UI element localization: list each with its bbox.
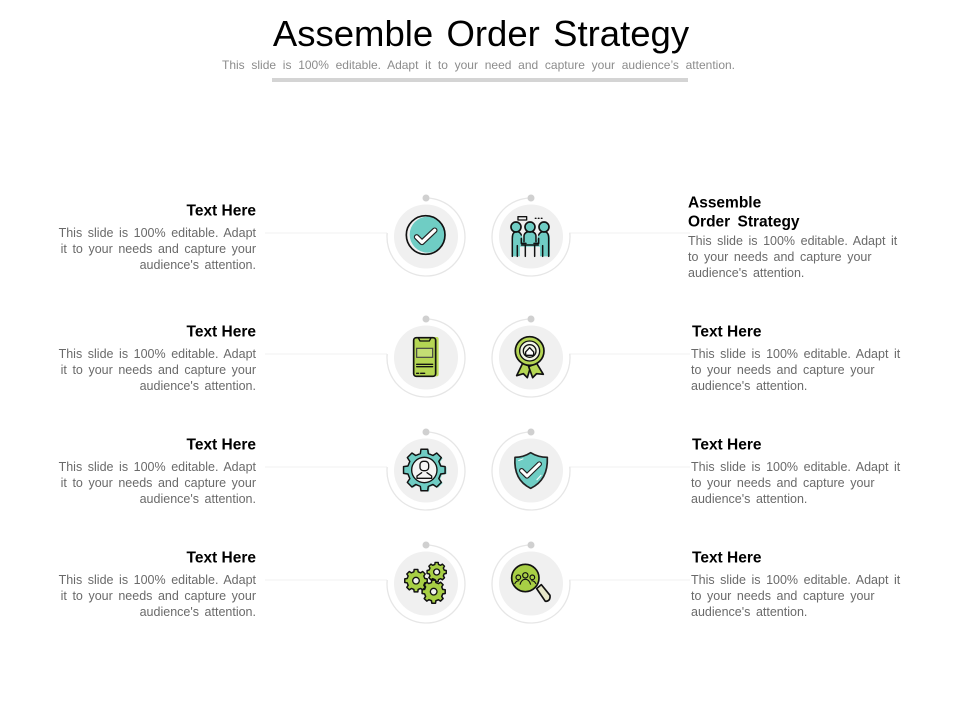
heading: Text Here	[186, 550, 256, 566]
heading: Text Here	[186, 324, 256, 340]
body text: it to your needs and capture your	[61, 242, 256, 256]
body text: This slide is 100% editable. Adapt it	[691, 460, 901, 474]
body text: This slide is 100% editable. Adapt it	[691, 347, 901, 361]
panel: left item 2 text	[59, 324, 257, 393]
body text: audience's attention.	[688, 266, 804, 280]
body text: to your needs and capture your	[688, 250, 872, 264]
body text: audience's attention.	[140, 492, 256, 506]
heading: Assemble	[688, 194, 762, 212]
body text	[59, 347, 257, 393]
body text: This slide is 100% editable. Adapt	[59, 573, 257, 587]
icon: gear with person	[404, 449, 446, 491]
heading: Text Here	[692, 324, 762, 340]
icon: award ribbon medal	[515, 337, 544, 378]
icon: security shield	[515, 453, 547, 488]
body text: audience's attention.	[691, 379, 807, 393]
icon: team meeting	[511, 217, 550, 257]
body text: This slide is 100% editable. Adapt	[59, 226, 257, 240]
title: Assemble Order Strategy	[273, 13, 690, 54]
heading	[688, 194, 800, 230]
panel: right item 4 text	[691, 550, 901, 619]
body text	[691, 347, 901, 393]
body text: to your needs and capture your	[691, 476, 875, 490]
ring node: left 1	[265, 194, 465, 276]
ring node: left 2	[265, 316, 465, 397]
icon: smartphone	[414, 337, 439, 376]
body text: This slide is 100% editable. Adapt	[59, 460, 257, 474]
heading: Text Here	[692, 550, 762, 566]
body text: This slide is 100% editable. Adapt it	[691, 573, 901, 587]
icon: three gears	[405, 562, 446, 603]
body text: This slide is 100% editable. Adapt it	[688, 234, 898, 248]
title underline bar	[272, 78, 688, 82]
ring node: left 3	[265, 428, 465, 510]
ring node: right 2	[492, 316, 690, 397]
panel: left item 1 text	[59, 202, 257, 272]
body text: audience's attention.	[140, 605, 256, 619]
subtitle: This slide is 100% editable. Adapt it to your need and capture your audience’s attention.	[222, 58, 735, 72]
heading: Order Strategy	[688, 214, 800, 230]
heading: Text Here	[186, 202, 256, 220]
panel: right item 2 text	[691, 324, 901, 393]
body text: audience's attention.	[140, 258, 256, 272]
body text: audience's attention.	[691, 605, 807, 619]
body text	[691, 460, 901, 506]
panel: right item 3 text	[691, 436, 901, 506]
body text: to your needs and capture your	[691, 363, 875, 377]
body text: to your needs and capture your	[691, 589, 875, 603]
body text	[691, 573, 901, 619]
ring node: right 3	[492, 428, 690, 510]
panel: left item 3 text	[59, 436, 257, 506]
body text: it to your needs and capture your	[61, 476, 256, 490]
body text	[59, 460, 257, 506]
body text: audience's attention.	[140, 379, 256, 393]
panel: left item 4 text	[59, 550, 257, 619]
heading: Text Here	[186, 436, 256, 454]
icon: magnifier with people	[512, 564, 550, 601]
body text	[688, 234, 898, 280]
body text	[59, 226, 257, 272]
ring node: left 4	[265, 542, 465, 623]
panel: right item 1 text	[688, 194, 898, 280]
ring node: right 4	[492, 542, 690, 623]
body text	[59, 573, 257, 619]
body text: it to your needs and capture your	[61, 589, 256, 603]
ring node: right 1	[492, 194, 690, 276]
body text: it to your needs and capture your	[61, 363, 256, 377]
heading: Text Here	[692, 436, 762, 454]
body text: audience's attention.	[691, 492, 807, 506]
body text: This slide is 100% editable. Adapt	[59, 347, 257, 361]
icon: check mark badge	[406, 216, 446, 254]
